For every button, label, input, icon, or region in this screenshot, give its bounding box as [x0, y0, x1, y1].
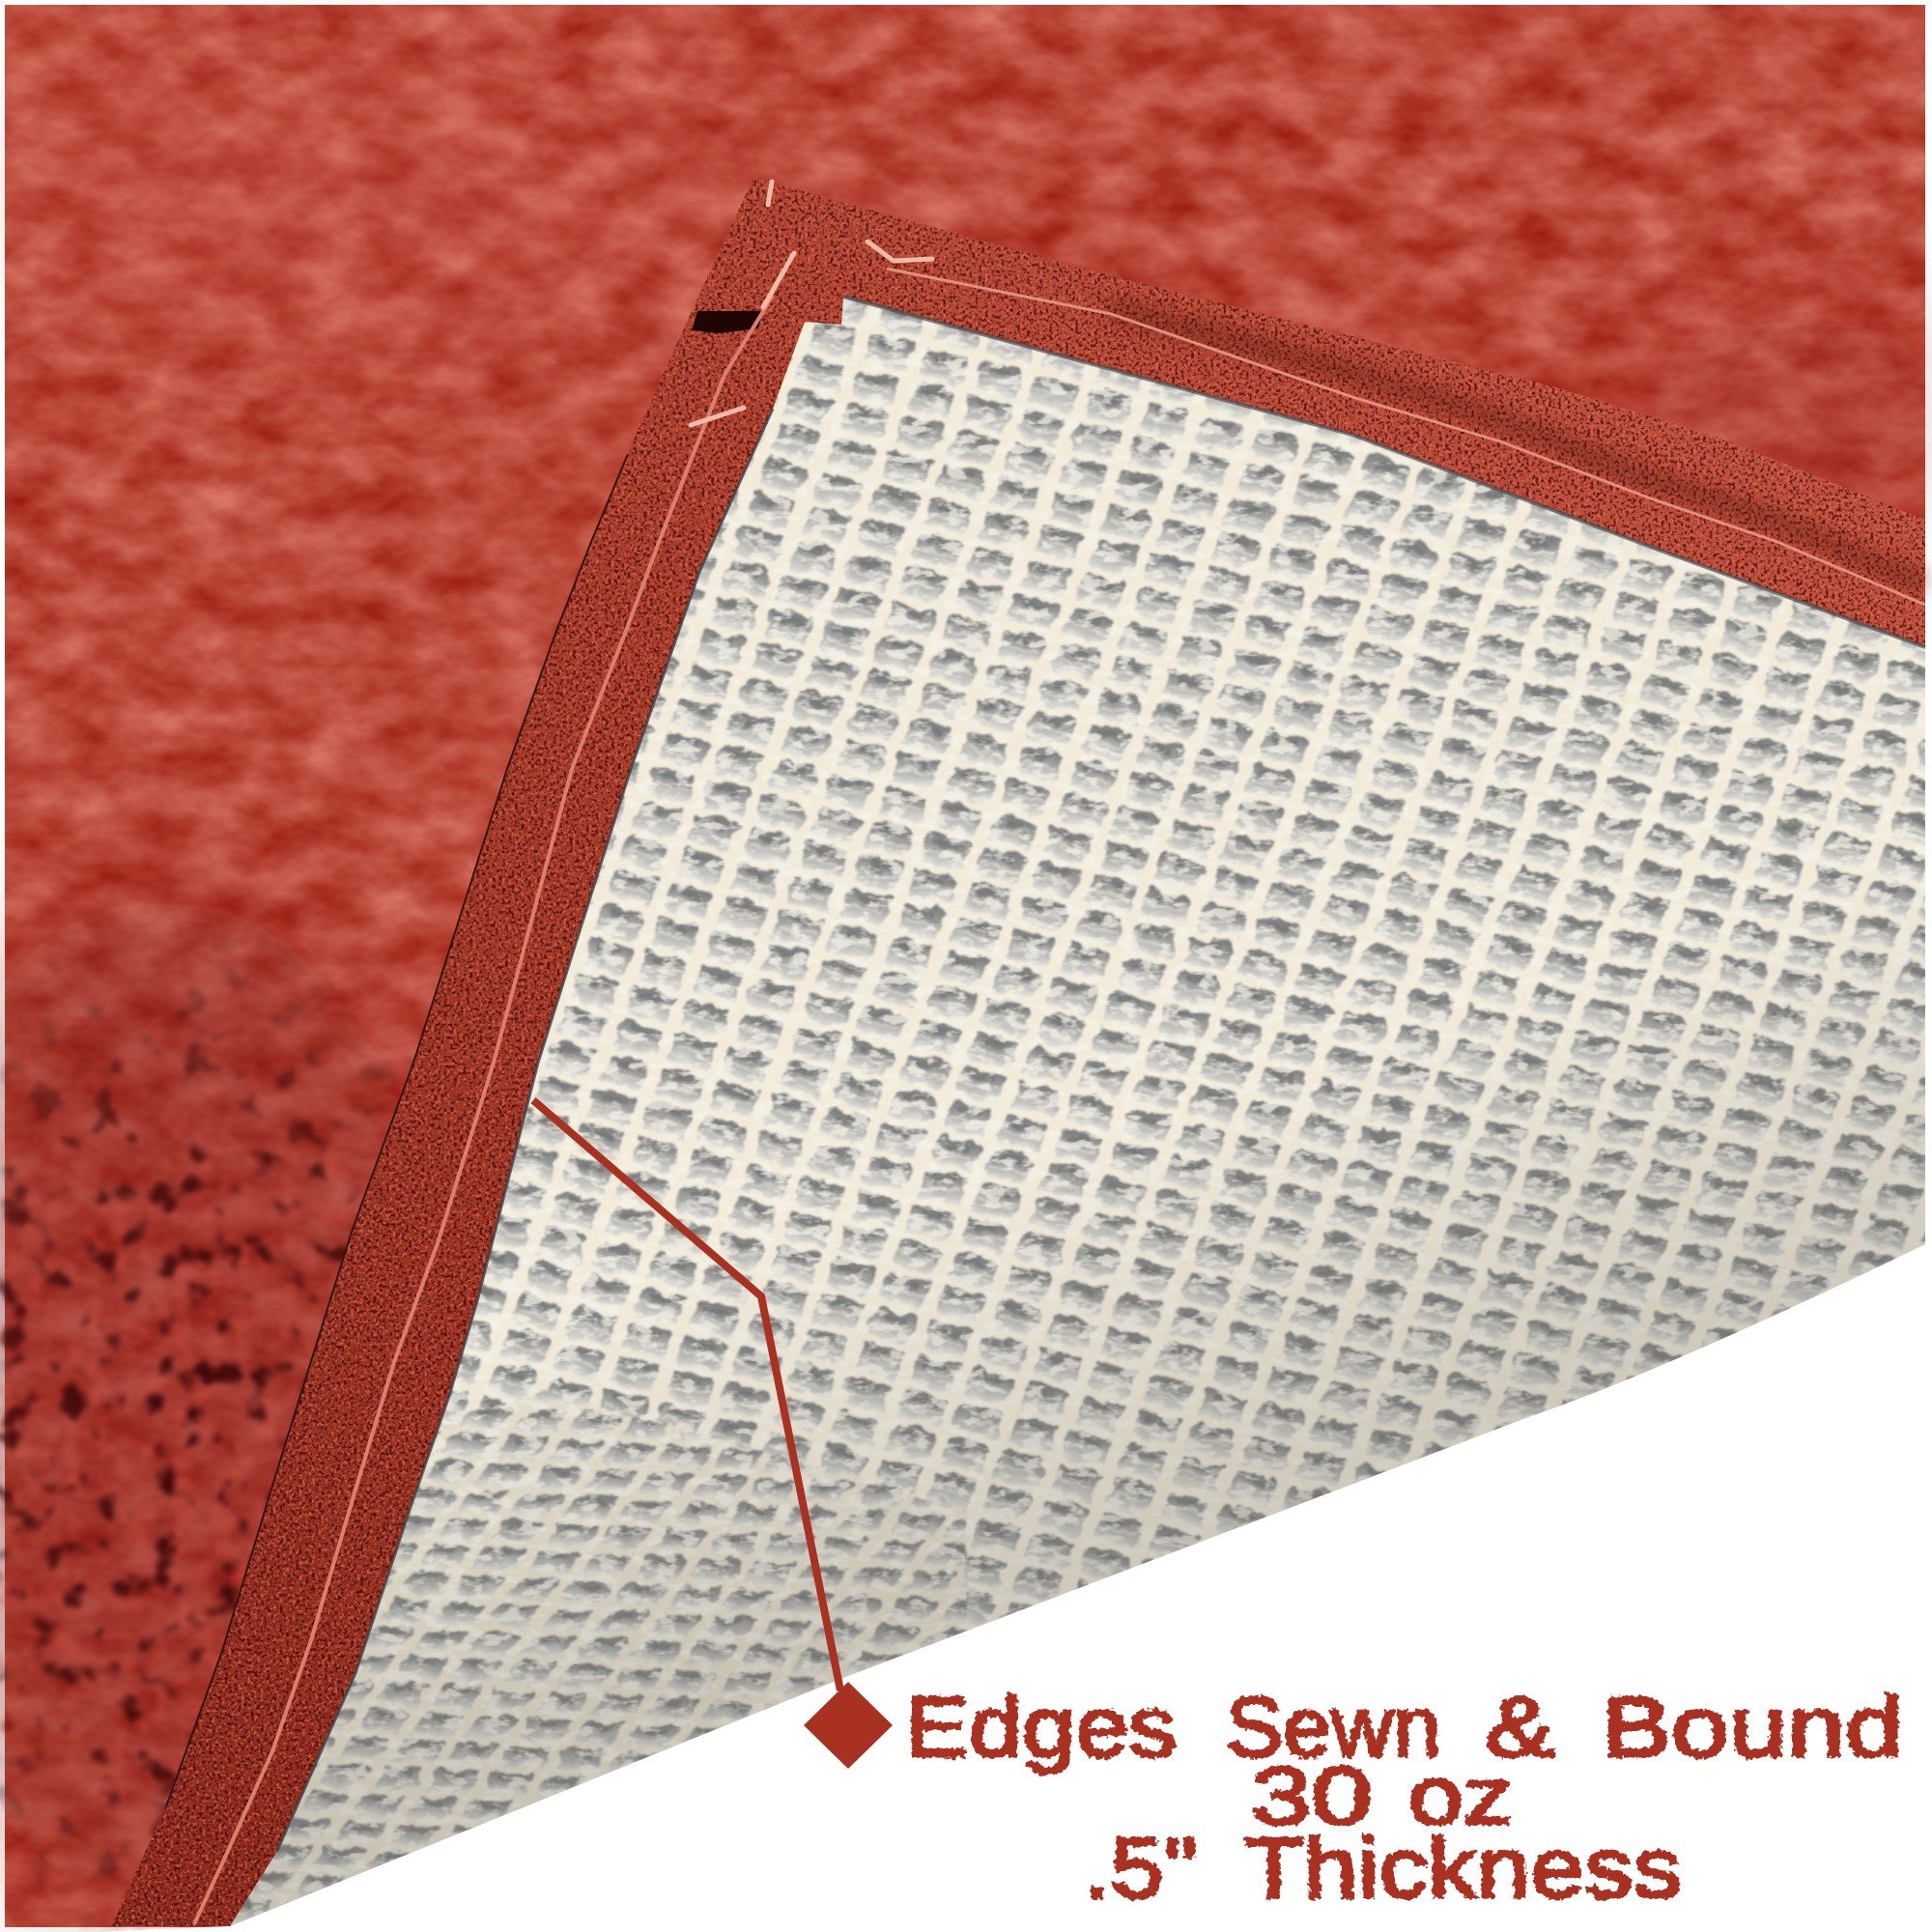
callout line 1: Bound [1602, 1679, 1903, 1775]
callout line 1: & [1485, 1679, 1555, 1775]
callout leader line [533, 1100, 840, 1690]
stitching: left edge [194, 296, 773, 1924]
callout line 1: Edges [905, 1679, 1177, 1775]
stitching: top edge [887, 269, 1925, 605]
callout line 1: Sewn [1226, 1679, 1441, 1775]
callout line 3 [1084, 1820, 1682, 1916]
inner edge shadow [843, 297, 1925, 647]
white wedge under the carpet [97, 1227, 1927, 1932]
callout line 1 [905, 1679, 1903, 1775]
corner fold highlights [691, 182, 932, 425]
callout line 3: .5" [1084, 1820, 1198, 1916]
shaded band above top stitch [1111, 309, 1925, 584]
outer edge shadow [166, 454, 628, 1806]
callout text [905, 1679, 1903, 1916]
callout line 3: Thickness [1244, 1820, 1682, 1916]
icon: diamond marker [804, 1682, 893, 1769]
dark fold at corner [692, 311, 763, 333]
callout line 2: 30 [1251, 1750, 1372, 1841]
callout line 2: oz [1408, 1750, 1513, 1841]
callout line 2 [1251, 1750, 1513, 1841]
